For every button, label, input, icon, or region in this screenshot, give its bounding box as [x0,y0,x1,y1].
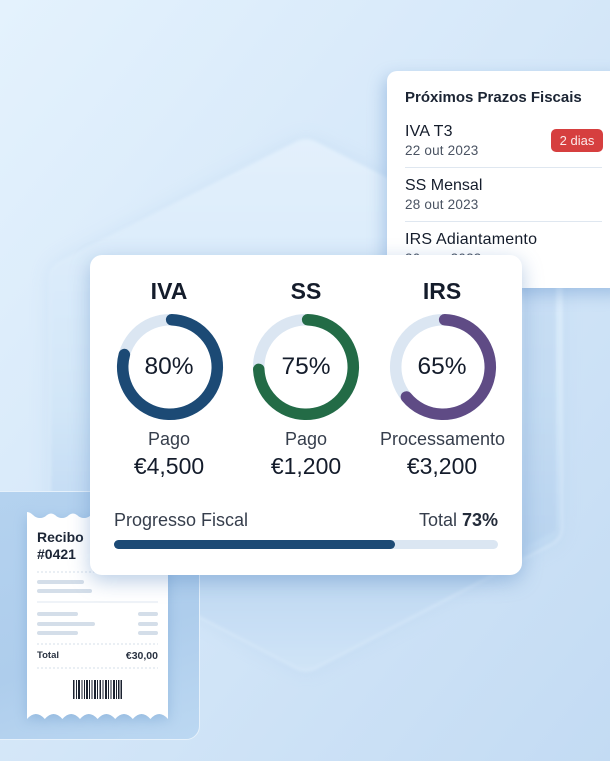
amount: €1,200: €1,200 [271,453,341,479]
icon: barcode [73,680,122,699]
donut chart: IVA 80% [116,314,224,420]
value: 80%: 80% [144,353,194,380]
progress fill [114,540,395,549]
receipt total amount: €30,00 [126,650,158,662]
badge: 2 dias [551,129,603,152]
value: 65%: 65% [417,353,467,380]
panel: receipt [23,512,172,724]
donut chart: SS 75% [253,314,360,420]
receipt total label: Total [37,650,59,661]
status: Pago: Pago [148,429,190,449]
deadline date: 30 nov 2023 [405,251,482,266]
panel: tax progress [90,255,522,575]
deadlines heading: Próximos Prazos Fiscais [405,89,582,106]
receipt title: Recibo #0421 [37,529,84,562]
deadline date: 28 out 2023 [405,197,479,212]
donut chart: IRS 65% [390,314,496,420]
progress bar [114,540,498,549]
status: Pago: Pago [285,429,327,449]
deadline: SS Mensal: SS Mensal [405,177,482,194]
status: Processamento: Processamento [380,429,505,449]
heading: IVA: IVA [151,278,187,304]
heading: IRS: IRS [423,278,461,304]
value: 75%: 75% [281,353,331,380]
deadline date: 22 out 2023 [405,143,479,158]
panel: upcoming deadlines [387,71,610,288]
amount: €4,500: €4,500 [134,453,204,479]
amount: €3,200: €3,200 [407,453,477,479]
heading: SS: SS [291,278,321,304]
deadline: IRS Adiantamento: IRS Adiantamento [405,231,537,248]
deadline: IVA T3: IVA T3 [405,123,453,140]
progress total: Total 73% [419,510,498,530]
badge: 2 dias: 2 dias [560,133,594,148]
receipt line items [37,572,158,668]
panel: receipt frame [0,491,200,740]
progress label: Progresso Fiscal [114,510,248,530]
